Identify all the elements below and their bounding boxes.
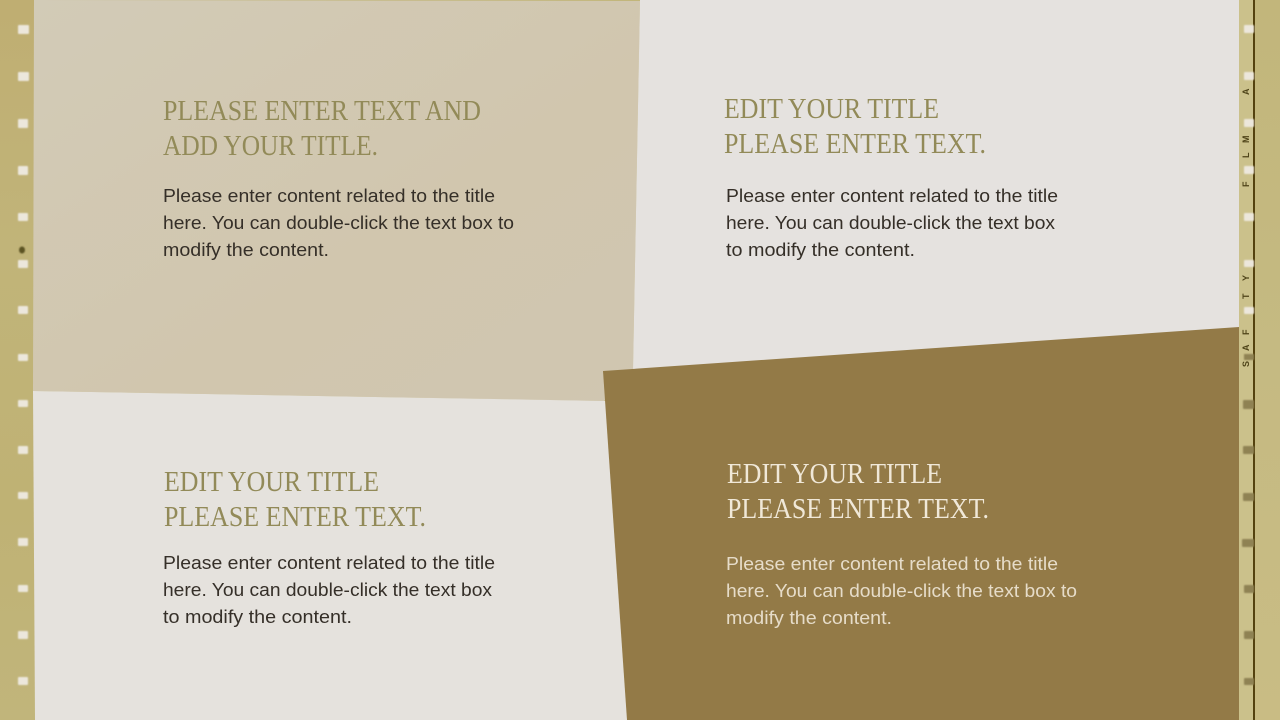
film edge lettering: M — [1241, 136, 1251, 143]
right sprocket holes: white — [1244, 25, 1254, 314]
heading: top left: ADD YOUR TITLE. — [163, 130, 378, 162]
left film strip — [0, 0, 36, 720]
body text: bottom right: here. You can double-click the text box to — [726, 580, 1077, 601]
heading: top right: PLEASE ENTER TEXT. — [724, 128, 986, 160]
body text: bottom right: Please enter content related to the title — [726, 553, 1058, 574]
film edge lettering: L — [1241, 152, 1251, 158]
right film strip — [1236, 0, 1280, 720]
body text: top left: modify the content. — [163, 239, 329, 260]
panel: bottom right — [603, 327, 1239, 720]
film edge line — [1253, 0, 1255, 720]
body text: top right: here. You can double-click the text box — [726, 212, 1056, 233]
right sprocket holes: dark — [1242, 354, 1254, 685]
body text: top right: Please enter content related to the title — [726, 185, 1058, 206]
film edge lettering: A — [1241, 344, 1251, 351]
heading: bottom left: PLEASE ENTER TEXT. — [164, 501, 426, 533]
film edge lettering — [1241, 88, 1251, 367]
heading: bottom right: EDIT YOUR TITLE — [727, 458, 942, 490]
heading: bottom right: PLEASE ENTER TEXT. — [727, 493, 989, 525]
film edge lettering: S — [1241, 361, 1251, 367]
body text: top left: Please enter content related to the title — [163, 185, 495, 206]
body text: bottom left: here. You can double-click the text box — [163, 579, 493, 600]
body text: bottom right: modify the content. — [726, 607, 892, 628]
film edge lettering: F — [1241, 329, 1251, 335]
heading: top right: EDIT YOUR TITLE — [724, 93, 939, 125]
film edge lettering: Y — [1241, 275, 1251, 281]
heading: bottom left: EDIT YOUR TITLE — [164, 466, 379, 498]
panel: top right — [633, 0, 1239, 370]
body text: top right: to modify the content. — [726, 239, 915, 260]
body text: bottom left: to modify the content. — [163, 606, 352, 627]
left sprocket holes — [18, 25, 29, 685]
film speck — [19, 246, 25, 254]
panel: bottom left — [33, 391, 628, 720]
body text: bottom left: Please enter content related to the title — [163, 552, 495, 573]
film edge lettering: T — [1241, 293, 1251, 299]
heading: top left: PLEASE ENTER TEXT AND — [163, 95, 481, 127]
film edge lettering: A — [1241, 88, 1251, 95]
film edge lettering: F — [1241, 181, 1251, 187]
body text: top left: here. You can double-click the text box to — [163, 212, 514, 233]
panel: top left — [33, 0, 640, 401]
